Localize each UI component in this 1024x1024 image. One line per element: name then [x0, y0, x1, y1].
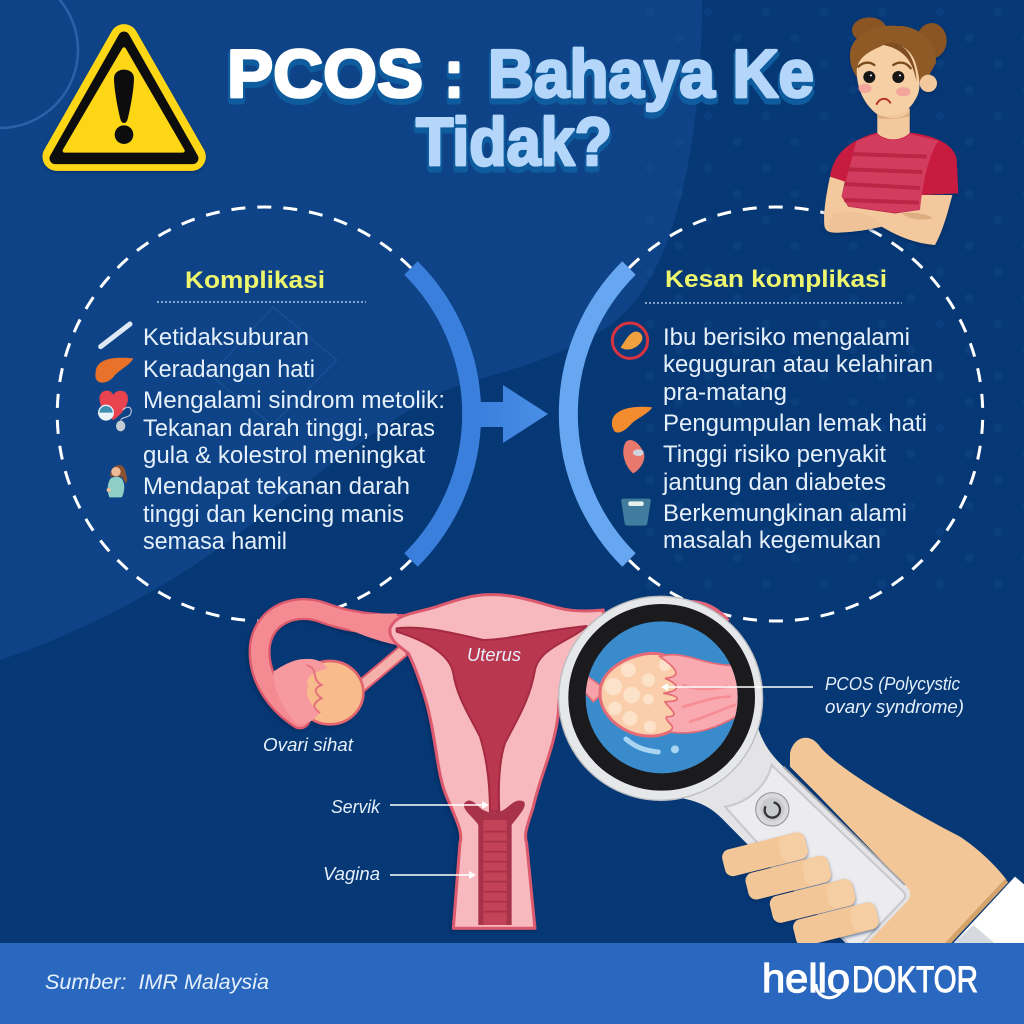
- list: kesan text: Pengumpulan lemak hati: [663, 410, 927, 437]
- right tube behind lens: [690, 600, 730, 621]
- list: komplikasi text: semasa hamil: [143, 528, 287, 555]
- list: kesan text: pra-matang: [663, 379, 787, 406]
- title: PCOS: [227, 36, 423, 112]
- label: uterus: Uterus: [467, 644, 521, 665]
- hand and magnifier: [559, 596, 1024, 948]
- list: kesan text: Berkemungkinan alami: [663, 500, 907, 527]
- title: Tidak?: [416, 108, 612, 184]
- magnifier handle: [677, 723, 910, 944]
- icon: heart and blood pressure gauge: [98, 391, 131, 431]
- label: pcos: ovary syndrome): [825, 696, 964, 717]
- list: komplikasi text: gula & kolestrol meningkat: [143, 442, 425, 469]
- fingers: [720, 831, 881, 948]
- icon: liver: [95, 358, 133, 383]
- list: kesan text: masalah kegemukan: [663, 527, 881, 554]
- left fallopian tube: [260, 609, 403, 718]
- dashed circle: right: [629, 207, 983, 621]
- icon: pregnancy test: [101, 324, 130, 347]
- uterus illustration: [260, 595, 603, 928]
- icons: komplikasi: [95, 324, 133, 497]
- title: Tidak?: [416, 104, 612, 180]
- list: kesan text: Tinggi risiko penyakit: [663, 441, 886, 468]
- logo: hello doktor: hello: [762, 957, 850, 1001]
- dashed circle: left: [57, 207, 411, 621]
- icon: liver: [612, 407, 652, 433]
- label: pcos: [661, 673, 964, 717]
- uterus body: [390, 595, 603, 928]
- source text: Sumber: IMR Malaysia: [45, 971, 269, 994]
- list: komplikasi text: [143, 324, 445, 555]
- heading: kesan komplikasi: Kesan komplikasi: [665, 266, 887, 293]
- list: kesan text: jantung dan diabetes: [662, 469, 886, 496]
- title: :: [444, 36, 464, 112]
- finger 1: [720, 831, 810, 878]
- list: kesan text: keguguran atau kelahiran: [663, 351, 933, 378]
- title: PCOS: [227, 40, 423, 116]
- logo: hello doktor: [762, 957, 978, 1001]
- right arc: [568, 268, 629, 560]
- icons: kesan komplikasi: [612, 323, 652, 526]
- icon: weighing scale: [621, 499, 651, 526]
- label: servik: [331, 796, 489, 817]
- list: kesan text: Ibu berisiko mengalami: [663, 324, 910, 351]
- cuff: [947, 877, 1024, 945]
- icon: heart organ: [623, 440, 644, 473]
- healthy ovary: [273, 659, 363, 724]
- magnifier head: [559, 596, 763, 800]
- title: Bahaya Ke: [488, 40, 814, 116]
- list: komplikasi text: Mengalami sindrom metolik:: [143, 387, 445, 414]
- cervix and vagina: [464, 801, 525, 925]
- label: vagina: [323, 863, 476, 884]
- list: kesan text: [662, 324, 933, 554]
- heading: komplikasi: Komplikasi: [185, 267, 325, 294]
- logo: hello doktor: DOKTOR: [852, 959, 978, 1000]
- arrow: [478, 385, 548, 443]
- title: [227, 36, 814, 184]
- label: vagina: Vagina: [323, 863, 380, 884]
- list: komplikasi text: tinggi dan kencing manis: [143, 501, 404, 528]
- finger 4: [793, 902, 881, 943]
- list: komplikasi text: Ketidaksuburan: [143, 324, 309, 351]
- panel: komplikasi: [95, 267, 445, 555]
- label: servik: Servik: [331, 796, 382, 817]
- left arc: [411, 268, 472, 560]
- icon: worried woman: [824, 17, 958, 245]
- icon: pregnant woman: [107, 465, 127, 497]
- uterine cavity: [397, 626, 587, 812]
- finger 2: [744, 854, 833, 901]
- label: pcos: PCOS (Polycystic: [825, 673, 961, 694]
- footer bar: [0, 943, 1024, 1024]
- list: komplikasi text: Tekanan darah tinggi, paras: [143, 415, 435, 442]
- title: :: [444, 40, 464, 116]
- hand back: [790, 738, 1007, 945]
- list: komplikasi text: Mendapat tekanan darah: [143, 473, 410, 500]
- icon: no fetus: [612, 323, 648, 358]
- power button: [756, 793, 789, 826]
- title: Bahaya Ke: [488, 36, 814, 112]
- list: komplikasi text: Keradangan hati: [143, 356, 315, 383]
- finger 3: [768, 877, 857, 924]
- icon: warning triangle: [55, 37, 193, 158]
- panel: kesan komplikasi: [612, 266, 933, 554]
- label: ovari sihat: Ovari sihat: [263, 734, 354, 755]
